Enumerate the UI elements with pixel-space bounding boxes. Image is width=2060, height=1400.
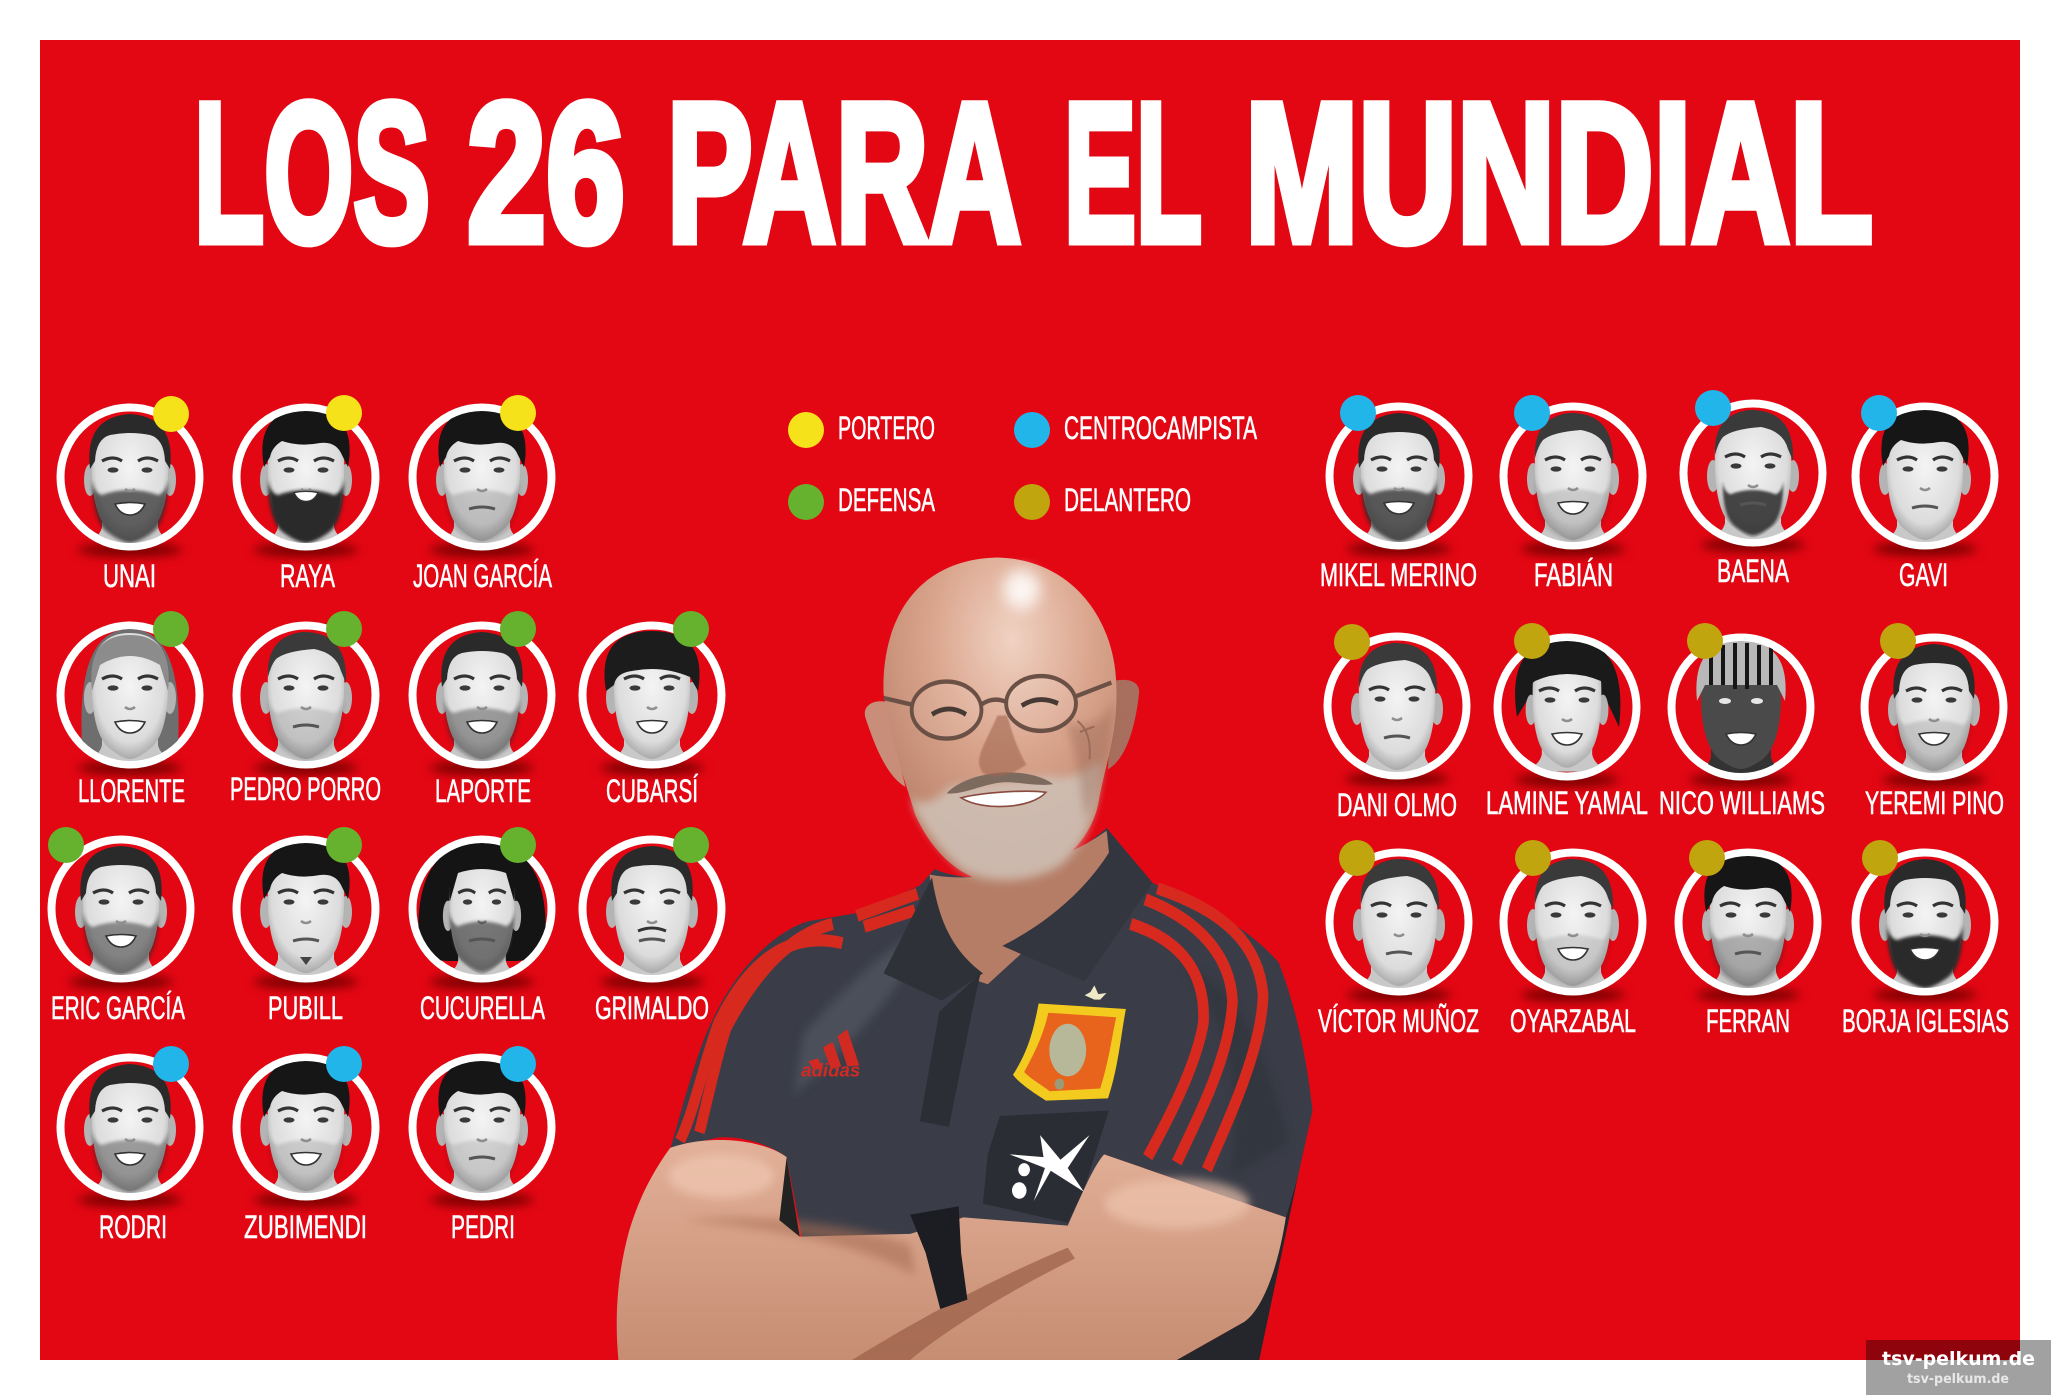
player: PUBILL: PUBILL <box>268 990 343 1026</box>
player: NICO WILLIAMS <box>1659 623 1825 821</box>
player: CUCURELLA <box>412 827 552 1026</box>
player: BORJA IGLESIAS <box>1842 840 2009 1039</box>
player: LAPORTE: LAPORTE <box>435 773 531 809</box>
player: LAMINE YAMAL: LAMINE YAMAL <box>1486 785 1648 821</box>
legend: DELANTERO <box>1064 482 1191 518</box>
player: GAVI <box>1856 395 1994 593</box>
player: PEDRO PORRO <box>230 611 381 807</box>
legend: DEFENSA <box>838 482 935 518</box>
nose and eyes <box>979 716 1027 776</box>
title: EL <box>1064 62 1202 283</box>
shirt stripes <box>680 888 1263 1170</box>
player: BAENA <box>1684 390 1822 589</box>
mouth and moustache <box>947 772 1053 794</box>
player: BAENA: BAENA <box>1717 553 1789 589</box>
player: YEREMI PINO <box>1864 623 2004 821</box>
legend: PORTERO <box>838 410 935 446</box>
title <box>194 62 1873 283</box>
player: ZUBIMENDI <box>236 1046 376 1245</box>
player: ERIC GARCÍA <box>48 827 190 1026</box>
player: ZUBIMENDI: ZUBIMENDI <box>244 1209 367 1245</box>
glasses <box>884 676 1111 739</box>
title: LOS <box>194 62 430 283</box>
adidas logo <box>801 1029 861 1081</box>
player: GRIMALDO <box>582 827 722 1026</box>
player: RAYA <box>236 395 376 594</box>
crest <box>1013 985 1126 1101</box>
player: FABIÁN <box>1504 395 1642 593</box>
player: VÍCTOR MUÑOZ: VÍCTOR MUÑOZ <box>1318 1003 1479 1039</box>
player: PEDRI: PEDRI <box>451 1209 515 1245</box>
player: PEDRO PORRO: PEDRO PORRO <box>230 771 381 807</box>
player: ERIC GARCÍA: ERIC GARCÍA <box>51 990 185 1026</box>
player: MIKEL MERINO: MIKEL MERINO <box>1320 557 1477 593</box>
player: JOAN GARCÍA <box>412 395 552 594</box>
legend <box>788 410 1257 520</box>
player: CUBARSÍ <box>582 611 722 809</box>
legend: CENTROCAMPISTA <box>1064 410 1257 446</box>
player: PUBILL <box>236 827 376 1026</box>
player: RAYA: RAYA <box>280 558 335 594</box>
ears <box>865 701 905 787</box>
player: PEDRI <box>412 1046 552 1245</box>
watermark: tsv-pelkum.de <box>1882 1348 2035 1370</box>
player: CUBARSÍ: CUBARSÍ <box>606 773 698 809</box>
adidas logo: adidas <box>801 1059 861 1081</box>
coach figure <box>617 558 1313 1360</box>
player: UNAI <box>60 396 200 594</box>
watermark <box>1866 1340 2051 1395</box>
arms <box>617 1140 1286 1360</box>
watermark: tsv-pelkum.de <box>1907 1372 2009 1387</box>
player: NICO WILLIAMS: NICO WILLIAMS <box>1659 785 1825 821</box>
player: JOAN GARCÍA: JOAN GARCÍA <box>413 558 552 594</box>
sponsor badge <box>983 1110 1109 1223</box>
watch <box>910 1206 967 1309</box>
player: CUCURELLA: CUCURELLA <box>420 990 545 1026</box>
player: VÍCTOR MUÑOZ <box>1318 840 1479 1039</box>
player: LAPORTE <box>412 611 552 809</box>
player: OYARZABAL <box>1504 840 1642 1039</box>
player: MIKEL MERINO <box>1320 395 1477 593</box>
player: LAMINE YAMAL <box>1486 623 1648 821</box>
player: UNAI: UNAI <box>103 558 156 594</box>
player: DANI OLMO <box>1328 624 1466 823</box>
lower right shirt back <box>1177 1176 1298 1360</box>
player: GAVI: GAVI <box>1899 557 1948 593</box>
collar and neck <box>930 831 1114 984</box>
player: FERRAN <box>1678 840 1818 1039</box>
player: LLORENTE: LLORENTE <box>78 773 185 809</box>
player: LLORENTE <box>60 611 200 809</box>
title: 26 <box>467 62 625 283</box>
player: OYARZABAL: OYARZABAL <box>1510 1003 1636 1039</box>
stubble <box>910 759 1102 880</box>
player: RODRI: RODRI <box>99 1209 167 1245</box>
player: FABIÁN: FABIÁN <box>1534 557 1613 593</box>
shirt <box>670 828 1313 1245</box>
player: DANI OLMO: DANI OLMO <box>1337 787 1457 823</box>
player: FERRAN: FERRAN <box>1706 1003 1790 1039</box>
title: PARA <box>667 62 1021 283</box>
head <box>883 558 1117 884</box>
player: GRIMALDO: GRIMALDO <box>595 990 709 1026</box>
player: RODRI <box>60 1046 200 1245</box>
